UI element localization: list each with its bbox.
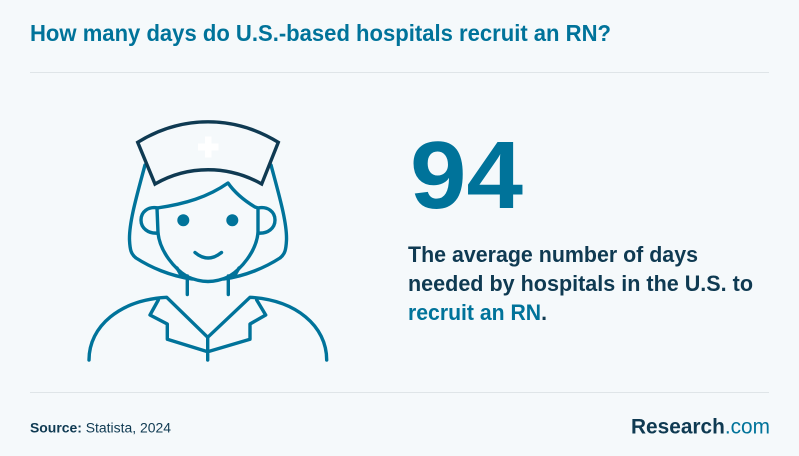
neck bbox=[177, 268, 239, 294]
logo: Research.com bbox=[631, 416, 770, 438]
description: recruit an RN. bbox=[408, 300, 547, 325]
description: The average number of days bbox=[408, 242, 698, 267]
collar flaps bbox=[150, 300, 266, 360]
source: Source: Statista, 2024 bbox=[30, 420, 172, 436]
shoulders and collar bbox=[89, 297, 327, 360]
hair bbox=[129, 165, 287, 279]
big number: 94 bbox=[410, 122, 523, 229]
icon: nurse bbox=[89, 165, 327, 360]
icon: nurse cap bbox=[138, 122, 278, 184]
cross bbox=[198, 136, 218, 158]
description bbox=[408, 242, 753, 325]
face bbox=[157, 183, 258, 282]
title: How many days do U.S.-based hospitals recruit an RN? bbox=[30, 20, 611, 46]
ears bbox=[141, 208, 275, 233]
smile bbox=[195, 252, 222, 258]
description: needed by hospitals in the U.S. to bbox=[408, 271, 753, 296]
eyes bbox=[177, 214, 238, 226]
